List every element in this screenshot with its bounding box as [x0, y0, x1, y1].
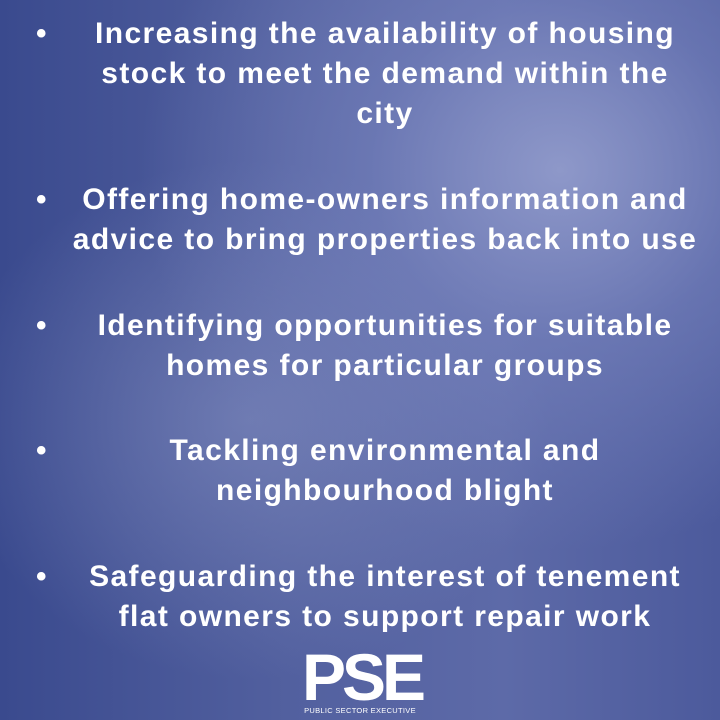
item 5 [36, 560, 681, 633]
item 2: • [36, 183, 47, 216]
item 1: Increasing the availability of housing [95, 17, 675, 50]
item 5: flat owners to support repair work [119, 600, 651, 633]
item 1: city [356, 97, 414, 130]
item 2: advice to bring properties back into use [73, 223, 697, 256]
item 4 [36, 434, 600, 507]
item 3: homes for particular groups [166, 349, 604, 382]
item 4: neighbourhood blight [216, 474, 554, 507]
item 1: stock to meet the demand within the [101, 57, 669, 90]
item 3: Identifying opportunities for suitable [98, 309, 672, 342]
logo: PSE: PSE [302, 640, 422, 714]
item 4: • [36, 434, 47, 467]
item 1: • [36, 17, 47, 50]
item 4: Tackling environmental and [170, 434, 600, 467]
item 1 [36, 17, 675, 130]
item 3: • [36, 309, 47, 342]
item 2: Offering home-owners information and [82, 183, 688, 216]
item 2 [36, 183, 697, 256]
item 5: Safeguarding the interest of tenement [89, 560, 681, 593]
item 5: • [36, 560, 47, 593]
logo: PSE: PUBLIC SECTOR EXECUTIVE [304, 706, 416, 715]
item 3 [36, 309, 672, 382]
